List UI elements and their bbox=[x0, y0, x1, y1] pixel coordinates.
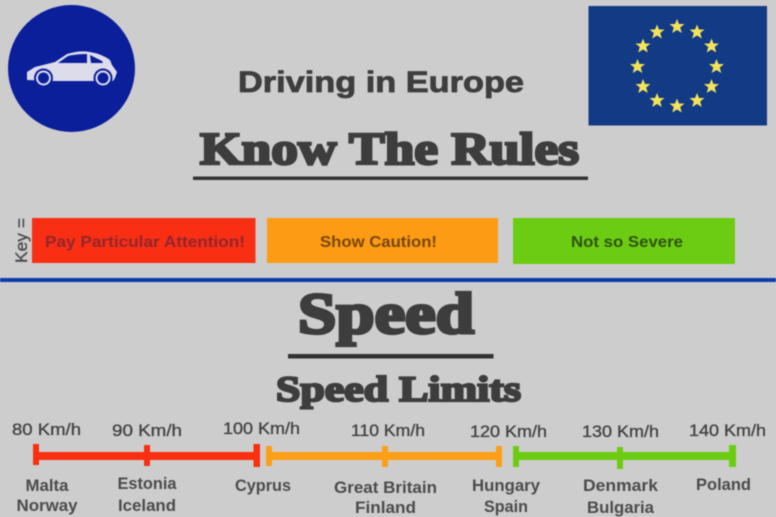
country labels: Hungary bbox=[472, 476, 541, 495]
speed labels: 120 Km/h bbox=[470, 422, 547, 441]
speed labels: 140 Km/h bbox=[689, 421, 766, 440]
timeline: red 80 to 100 bbox=[33, 444, 260, 467]
country labels: Iceland bbox=[118, 496, 176, 515]
icon: EU flag bbox=[588, 6, 767, 126]
speed labels: 100 Km/h bbox=[223, 419, 300, 438]
country labels: Poland bbox=[696, 475, 751, 494]
section divider bbox=[0, 278, 776, 282]
timeline: green 120 to 140 bbox=[513, 445, 736, 469]
country labels: Bulgaria bbox=[587, 498, 655, 517]
key: pay particular attention bbox=[32, 218, 256, 263]
heading: speed: Speed bbox=[298, 281, 474, 346]
key: show caution: Show Caution! bbox=[320, 234, 437, 251]
speed labels: 80 Km/h bbox=[12, 420, 81, 439]
key: not so severe: Not so Severe bbox=[571, 234, 683, 251]
country labels: Great Britain bbox=[334, 478, 437, 497]
country labels: Cyprus bbox=[235, 476, 291, 495]
title: Know The Rules bbox=[200, 123, 579, 174]
key: not so severe bbox=[513, 218, 735, 264]
speed labels: 130 Km/h bbox=[582, 422, 659, 441]
country labels: Spain bbox=[484, 497, 528, 516]
timeline: orange 100 to 120 bbox=[266, 446, 502, 467]
country labels: Malta bbox=[26, 476, 69, 495]
key: pay particular attention: Pay Particular Attention! bbox=[45, 234, 245, 251]
key: show caution bbox=[267, 218, 498, 263]
country labels: Finland bbox=[355, 498, 416, 517]
icon: car in blue circle bbox=[8, 5, 135, 132]
country labels bbox=[16, 474, 751, 517]
country labels: Estonia bbox=[118, 474, 177, 493]
country labels: Denmark bbox=[583, 476, 659, 495]
key label: Key = bbox=[12, 218, 31, 263]
subtitle: Driving in Europe bbox=[238, 66, 524, 99]
speed labels: 110 Km/h bbox=[351, 421, 425, 440]
speed labels bbox=[12, 419, 766, 441]
country labels: Norway bbox=[16, 496, 78, 515]
title underline bbox=[193, 176, 588, 180]
subheading: speed limits: Speed Limits bbox=[276, 369, 521, 409]
heading underline bbox=[288, 354, 494, 358]
speed labels: 90 Km/h bbox=[112, 421, 182, 440]
